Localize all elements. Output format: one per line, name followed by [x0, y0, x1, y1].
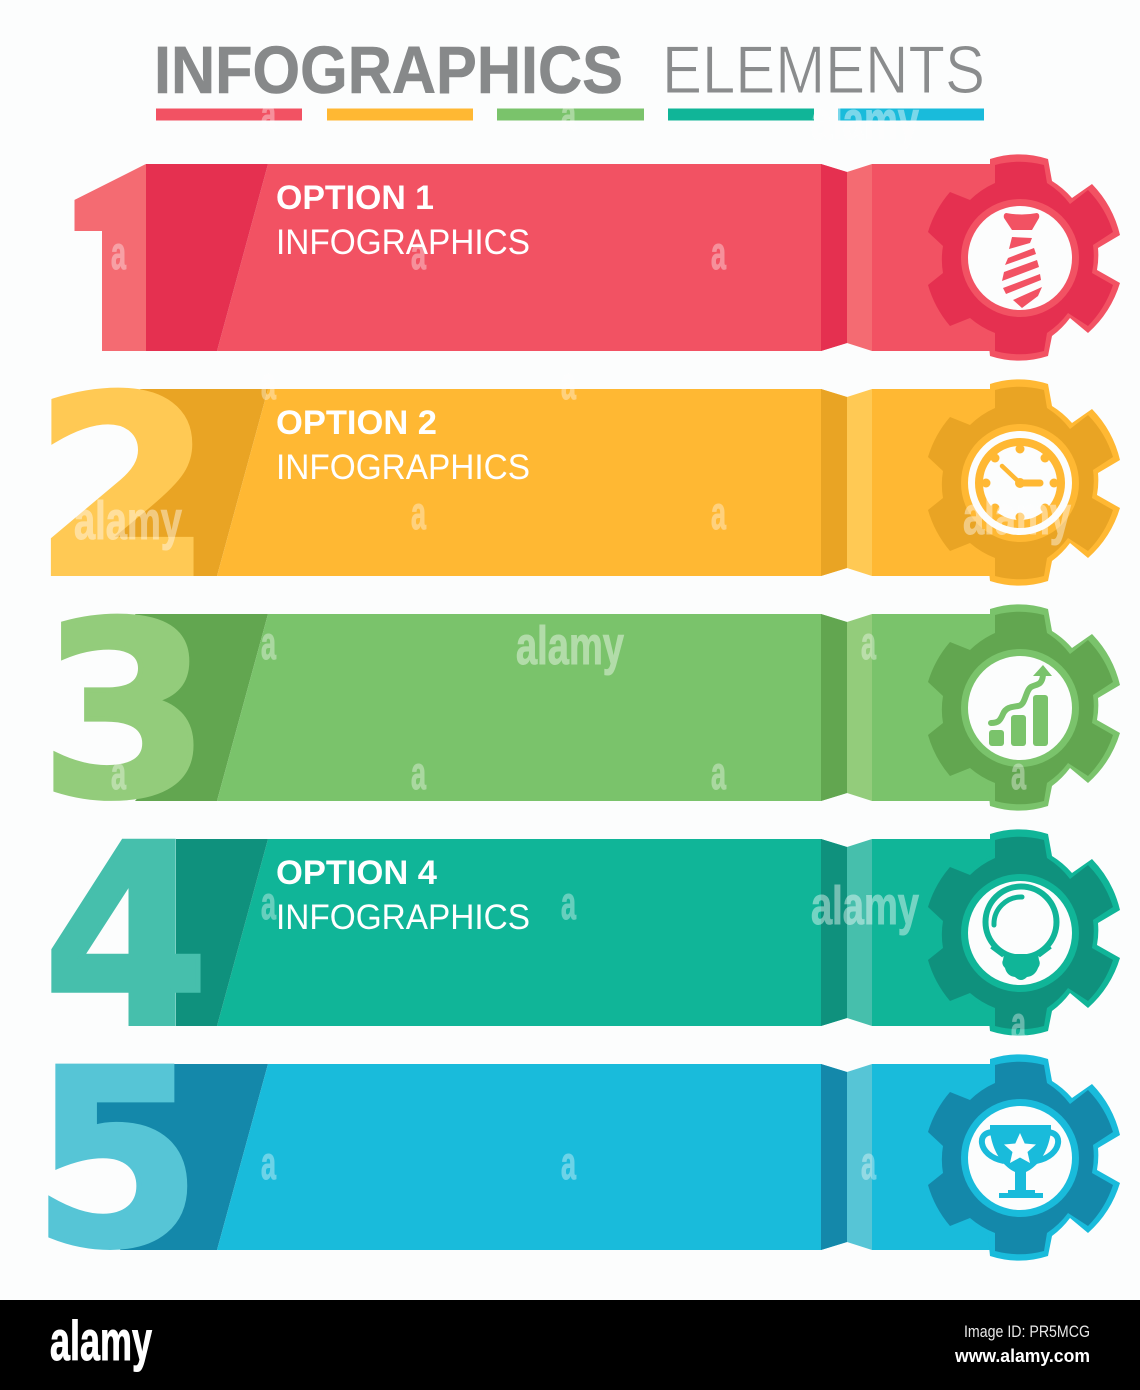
watermarks	[74, 88, 1071, 1189]
watermarks: alamy	[516, 616, 624, 676]
option 2 heading: OPTION 2	[276, 404, 437, 442]
watermarks: a	[1011, 997, 1026, 1049]
icon: light bulb	[986, 886, 1056, 980]
icon: necktie	[1002, 213, 1042, 308]
footer logo: alamy	[50, 1309, 152, 1372]
footer url: www.alamy.com	[954, 1346, 1090, 1366]
icon: clock	[979, 442, 1061, 524]
number 5: 5	[32, 1018, 202, 1302]
option 4 subheading: INFOGRAPHICS	[276, 898, 530, 937]
number 1: 1	[30, 114, 208, 412]
watermarks: a	[711, 227, 726, 279]
gear: trophy	[928, 1054, 1120, 1261]
watermarks: a	[561, 357, 576, 409]
watermarks: alamy	[963, 486, 1071, 546]
watermarks: a	[861, 1137, 876, 1189]
icon: bar chart with arrow	[989, 665, 1052, 746]
panel: option 3	[40, 572, 1120, 852]
footer bar	[0, 1300, 1140, 1390]
watermarks: a	[711, 487, 726, 539]
watermarks: a	[411, 747, 426, 799]
title: ELEMENTS	[662, 32, 985, 108]
watermarks: a	[561, 1137, 576, 1189]
watermarks: a	[111, 747, 126, 799]
title	[154, 32, 985, 108]
watermarks: a	[711, 747, 726, 799]
gear: tie	[928, 154, 1120, 361]
panel: option 2	[33, 344, 1120, 632]
option 1 heading: OPTION 1	[276, 179, 434, 217]
watermarks: a	[861, 617, 876, 669]
icon: trophy	[982, 1125, 1058, 1198]
watermarks: a	[261, 877, 276, 929]
panel: option 5	[32, 1018, 1120, 1302]
number 4: 4	[43, 791, 209, 1083]
gear: growth chart	[928, 604, 1120, 811]
gear: light bulb	[928, 829, 1120, 1036]
title colour bars	[156, 108, 984, 120]
watermarks: alamy	[74, 491, 182, 551]
watermarks: a	[261, 617, 276, 669]
number 2: 2	[33, 344, 213, 632]
watermarks: a	[411, 487, 426, 539]
watermarks: a	[561, 88, 576, 140]
watermarks: a	[1011, 747, 1026, 799]
footer image id: Image ID: PR5MCG	[964, 1322, 1090, 1341]
watermarks: a	[261, 357, 276, 409]
panel: option 4	[43, 791, 1120, 1083]
watermarks: alamy	[811, 91, 919, 151]
panel: option 1	[74, 154, 1120, 361]
watermarks: a	[261, 1137, 276, 1189]
watermarks: a	[411, 227, 426, 279]
watermarks: a	[561, 877, 576, 929]
option 4 heading: OPTION 4	[276, 854, 437, 892]
watermarks: a	[111, 227, 126, 279]
option 2 subheading: INFOGRAPHICS	[276, 448, 530, 487]
number 3: 3	[40, 572, 211, 852]
option 1 subheading: INFOGRAPHICS	[276, 223, 530, 262]
watermarks: alamy	[811, 876, 919, 936]
title: INFOGRAPHICS	[154, 33, 623, 108]
gear: clock	[928, 379, 1120, 586]
watermarks: a	[261, 88, 276, 140]
